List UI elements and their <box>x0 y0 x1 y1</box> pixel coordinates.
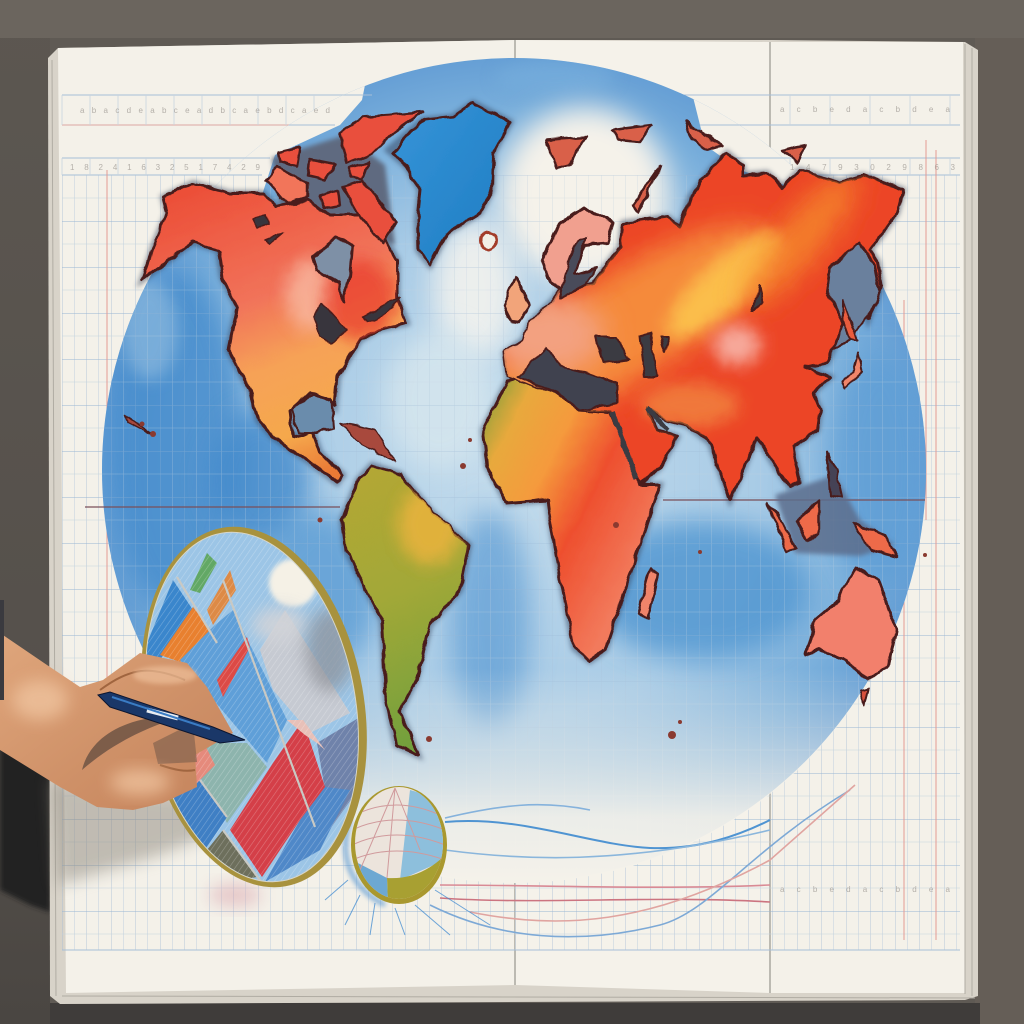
dark arctic and southeast asian seas <box>272 135 895 556</box>
Baltic Sea <box>560 238 598 298</box>
page notation marks: 1 4 7 9 3 0 2 9 8 6 3 <box>790 163 956 172</box>
Greenland <box>393 103 510 265</box>
diagram residue stain <box>209 883 261 907</box>
chart bars <box>146 533 358 881</box>
scattered island dots <box>140 422 927 742</box>
Black, Caspian, Aral seas and Baikal <box>595 285 762 377</box>
Madagascar <box>638 568 658 619</box>
page notation marks: 1 8 2 4 1 6 3 2 5 1 7 4 2 9 <box>70 163 261 172</box>
Canada mainland lobe <box>267 167 307 203</box>
page notation marks: a c b e d a c b d e a <box>780 105 951 114</box>
Tasmania <box>860 688 869 706</box>
hand shadow on paper <box>50 780 230 885</box>
Southeast Asia islands <box>767 500 897 557</box>
Eurasia <box>502 152 906 501</box>
Mediterranean Sea <box>518 347 617 410</box>
Great Lakes <box>253 214 400 343</box>
Kamchatka and Okhotsk sea <box>827 243 880 350</box>
hand <box>0 600 233 810</box>
magnifying lens with bar chart <box>142 526 367 888</box>
Arctic Canada islands <box>278 112 423 243</box>
equator line <box>85 500 925 507</box>
Australia <box>806 568 896 680</box>
Red Sea and Persian Gulf <box>612 407 667 480</box>
Iceland ring <box>480 232 496 248</box>
page notation marks: a c b e d a c b d e a <box>780 885 951 894</box>
circular ocean <box>102 58 926 883</box>
Philippines <box>827 453 842 497</box>
Gulf of Mexico sea <box>292 394 334 432</box>
small globe <box>350 785 450 905</box>
blue pencil scribble around globe <box>325 820 490 935</box>
continents <box>125 103 903 755</box>
Caribbean islands <box>125 415 395 462</box>
Japan <box>842 353 862 388</box>
Kuril Sakhalin <box>843 300 858 340</box>
Africa <box>483 378 660 661</box>
Scandinavia <box>542 207 613 292</box>
page notation marks <box>70 105 956 894</box>
South America <box>342 465 469 755</box>
graph paper grid <box>62 95 960 950</box>
Hudson Bay <box>313 237 353 302</box>
North America <box>142 183 407 483</box>
wave chart lines <box>430 785 855 937</box>
page notation marks: a b a c d e a b c e a d b c a e b d c a e d <box>80 106 330 115</box>
Arctic Russian islands <box>546 122 806 212</box>
pen <box>98 692 245 743</box>
coastal shadows <box>142 103 903 755</box>
Britain and Ireland <box>503 277 530 323</box>
